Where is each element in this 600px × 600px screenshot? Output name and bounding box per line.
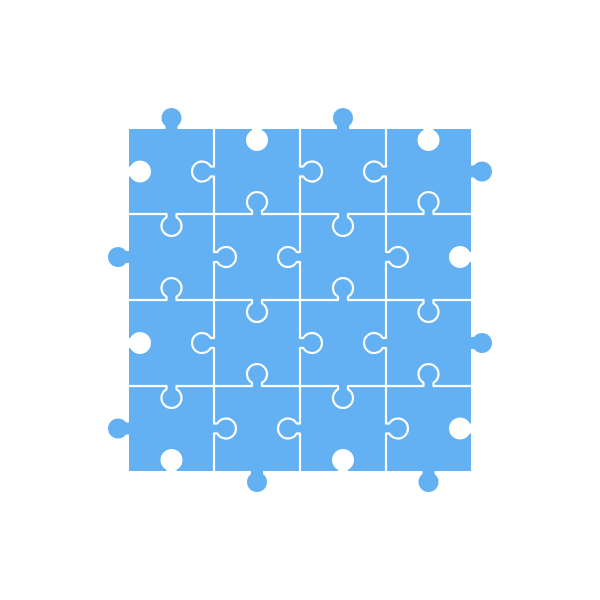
border notches — [128, 128, 472, 472]
puzzle base square — [129, 129, 471, 471]
outward border tabs — [108, 108, 492, 492]
interior piece seams — [129, 129, 471, 471]
puzzle: 4x4 jigsaw grid — [108, 108, 492, 492]
